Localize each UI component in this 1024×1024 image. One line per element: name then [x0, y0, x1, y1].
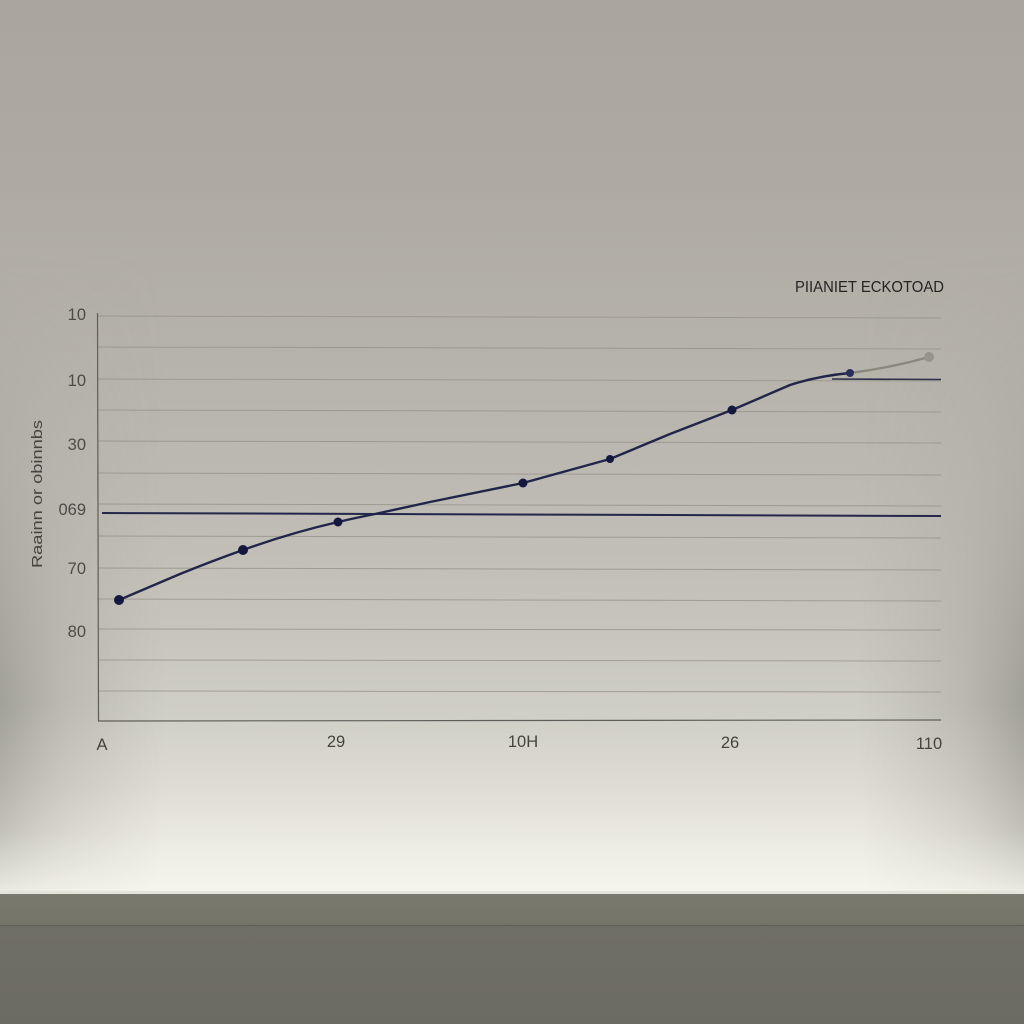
y axis labels: 10 — [68, 306, 86, 324]
y axis labels: 70 — [68, 560, 86, 578]
y axis labels: 10 — [68, 372, 86, 390]
y axis labels: 80 — [68, 623, 86, 641]
x axis labels — [96, 733, 942, 754]
x axis labels: 110 — [916, 735, 942, 753]
y axis title: Raainn or obinnbs — [29, 420, 46, 568]
x axis labels: 10H — [508, 733, 538, 751]
wall background — [0, 241, 1024, 891]
legend label: PIIANIET ECKOTOAD — [795, 279, 944, 296]
y axis labels: 069 — [58, 501, 86, 519]
shelf ledge — [0, 891, 1024, 1024]
faded series end — [850, 357, 929, 373]
x axis labels: 29 — [327, 733, 345, 751]
data series — [119, 373, 850, 600]
y axis labels — [58, 306, 86, 641]
x axis labels: 26 — [721, 734, 739, 752]
gridlines — [98, 316, 941, 692]
y axis labels: 30 — [68, 436, 86, 454]
data points — [114, 352, 934, 605]
reference line — [102, 513, 941, 516]
short reference line — [832, 378, 941, 380]
x axis labels: A — [96, 736, 108, 754]
line chart — [29, 279, 944, 754]
axes — [98, 313, 941, 721]
